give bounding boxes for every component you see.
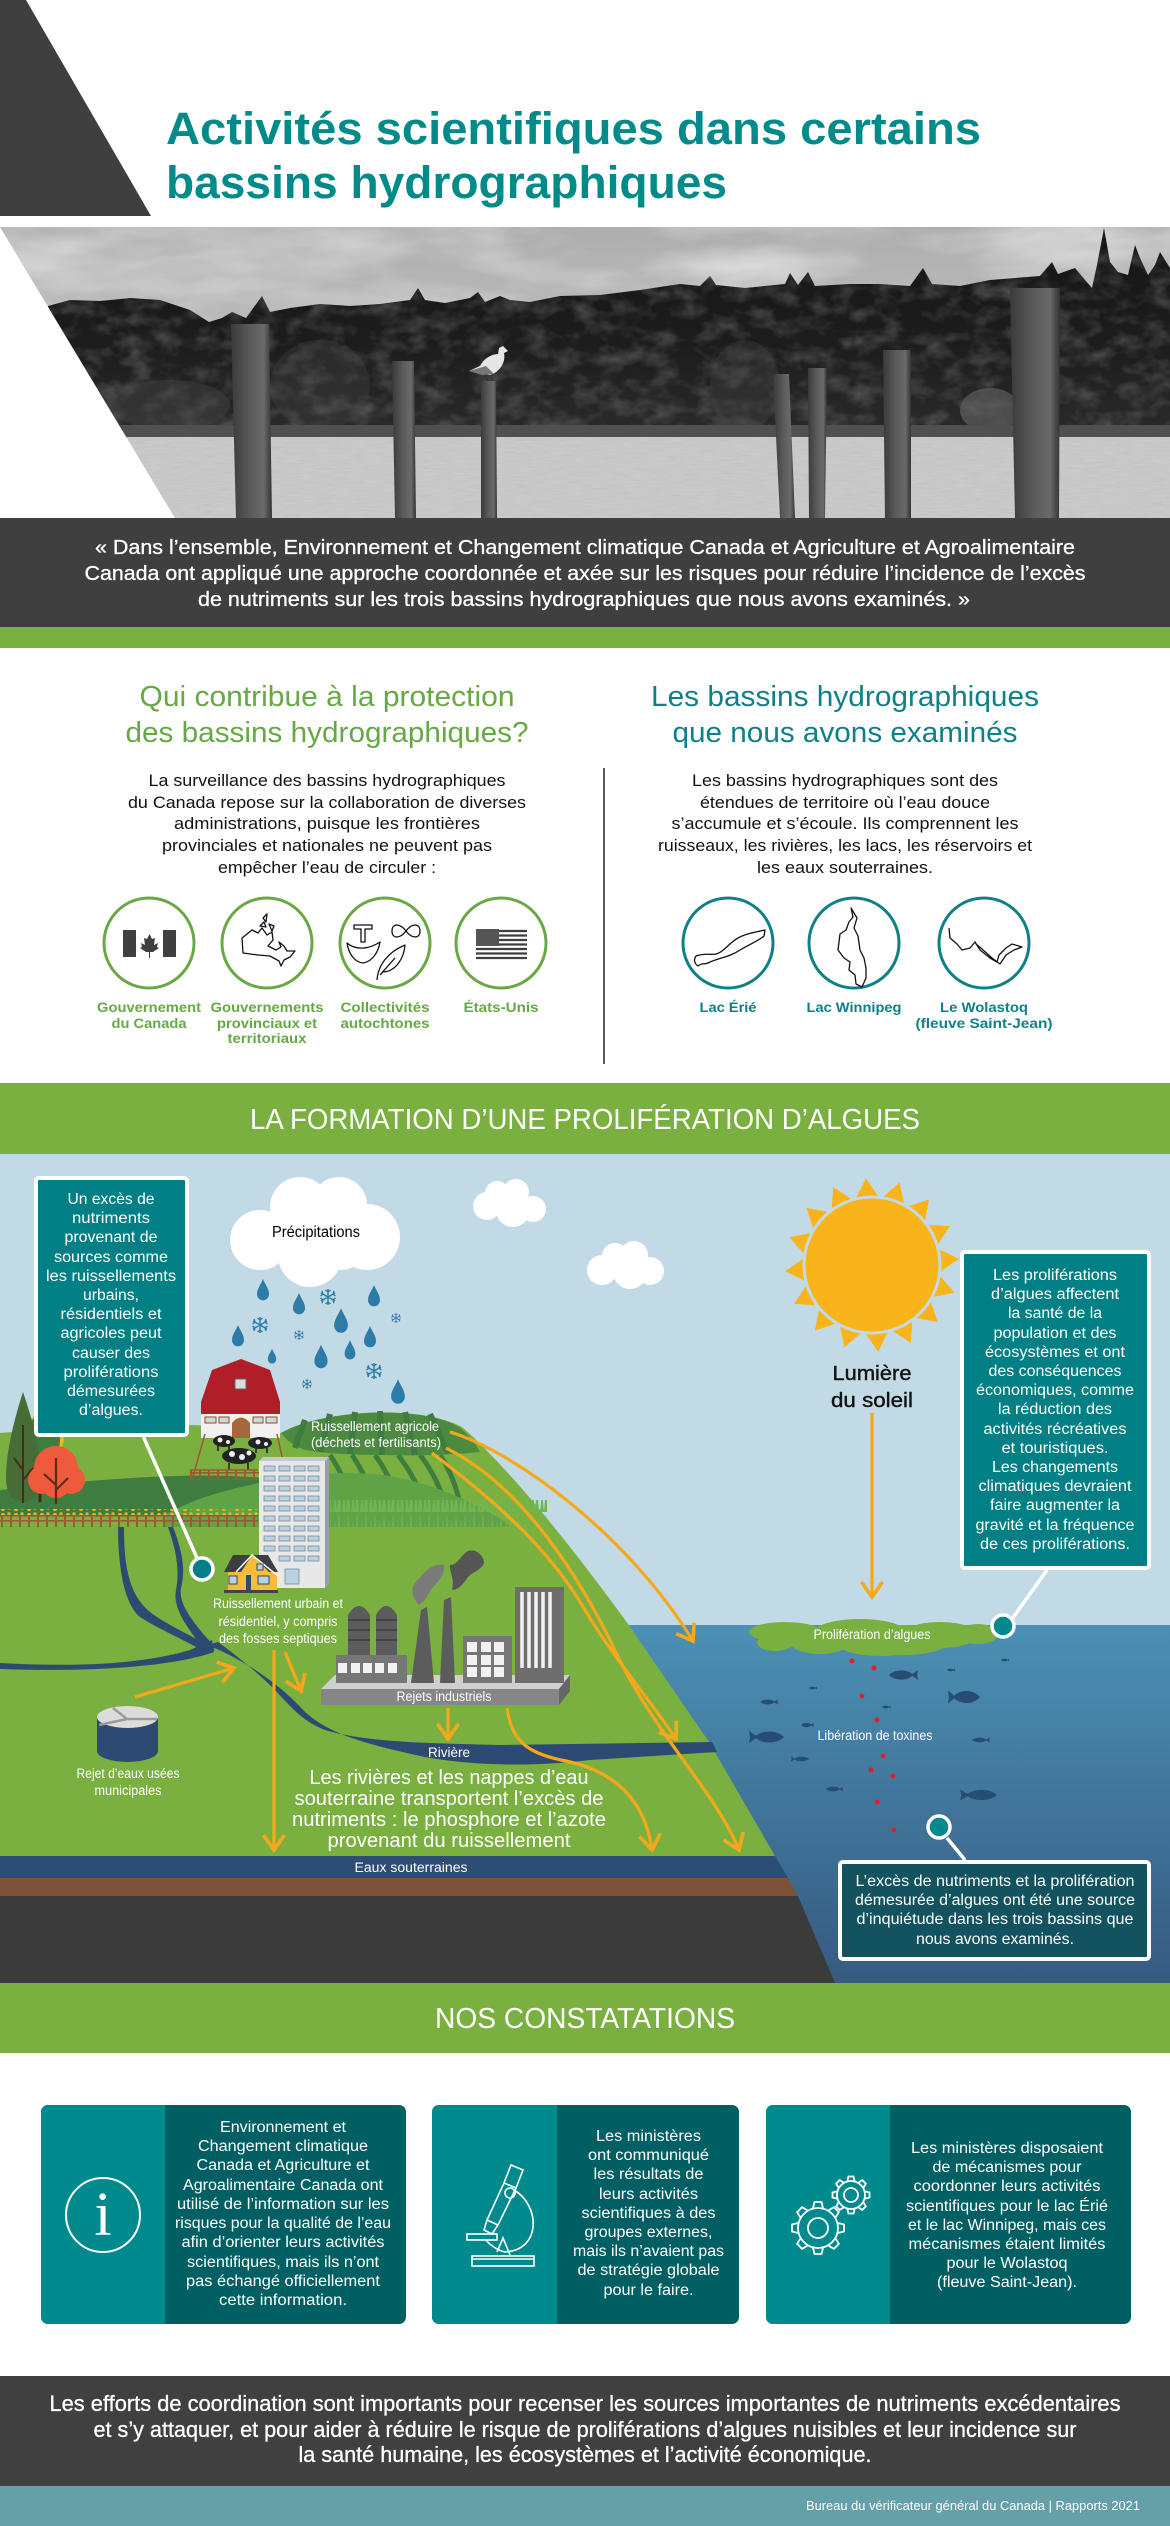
label: Indigenous communities [340, 999, 430, 1031]
text: finding 2: mais ils n’avaient pas [573, 2243, 724, 2260]
heading: who contributes: Qui contribue à la protection [140, 681, 514, 713]
dark corner triangle [0, 0, 151, 216]
callout: effects of blooms: d’algues affectent [991, 1286, 1120, 1303]
finding card 2 [432, 2105, 739, 2324]
label: United States: États-Unis [464, 999, 539, 1015]
callout: effects of blooms: la santé de la [1008, 1305, 1102, 1322]
text: finding 3: pour le Wolastoq [946, 2255, 1068, 2272]
icon: Lake Winnipeg [809, 898, 899, 988]
text: surveillance paragraph [128, 771, 526, 877]
labels on land: Rivière [428, 1745, 470, 1760]
label: Gouvernement du Canada: du Canada [112, 1015, 187, 1031]
finding card 1 [41, 2105, 406, 2324]
label: Lake Winnipeg: Lac Winnipeg [806, 999, 902, 1015]
label: provincial and territorial governments: Gouvernements [210, 999, 324, 1015]
callout: concern in all three watersheds: d’inquiétude dans les trois bassins que [856, 1911, 1134, 1928]
field with crop rows [281, 1411, 480, 1510]
heading: watersheds examined: Les bassins hydrographiques [651, 681, 1039, 713]
text: watershed definition: Les bassins hydrographiques sont des [692, 771, 998, 790]
labels on land: Ruissellement agricole [311, 1419, 439, 1434]
text: finding 1 [175, 2119, 391, 2309]
text: surveillance paragraph: empêcher l’eau de circuler : [218, 858, 436, 877]
hills and grass [0, 1473, 547, 1527]
section banner: algal bloom formation: LA FORMATION D’UNE PROLIFÉRATION D’ALGUES [250, 1103, 920, 1136]
text: surveillance paragraph: du Canada repose sur la collaboration de diverses [128, 793, 526, 812]
clouds [230, 1177, 664, 1289]
icon: map of Canada [222, 898, 312, 988]
text: finding 3: Les ministères disposaient [911, 2140, 1104, 2157]
heading: watersheds examined [651, 681, 1039, 749]
footer: Bureau du vérificateur général du Canada | Rapports 2021 [806, 2498, 1140, 2513]
label: provincial and territorial governments [210, 999, 324, 1046]
text: finding 2: ont communiqué [588, 2147, 709, 2164]
text: finding 2: groupes externes, [584, 2224, 712, 2241]
callout: effects of blooms [962, 1252, 1149, 1637]
text: finding 3: de mécanismes pour [932, 2159, 1082, 2176]
conclusion band [0, 2376, 1170, 2486]
water [600, 1625, 1170, 1983]
icon: Indigenous communities symbols [340, 898, 430, 988]
icon: microscope [467, 2165, 534, 2266]
divider [603, 768, 605, 1064]
rivers [0, 1527, 717, 1765]
callout: excess nutrients sources: urbains, [83, 1287, 139, 1304]
title [166, 103, 981, 208]
labels on land: des fosses septiques [219, 1631, 337, 1646]
panel: who protects the watersheds [97, 681, 546, 1046]
callout: effects of blooms: faire augmenter la [990, 1497, 1120, 1514]
diagram: algal bloom formation [0, 1154, 1170, 1983]
icon: Wolastoq [939, 898, 1029, 988]
label: toxin release: Libération de toxines [818, 1728, 933, 1743]
label: sunlight [831, 1363, 913, 1412]
label: Lake Erie: Lac Érié [700, 999, 757, 1015]
toxins: red dots [850, 1658, 896, 1832]
text: finding 2: Les ministères [596, 2128, 701, 2145]
conclusion band: la santé humaine, les écosystèmes et l’activité économique. [298, 2442, 872, 2467]
label: Gouvernement du Canada [97, 999, 201, 1031]
groundwater and soil layers [0, 1856, 835, 1983]
text: finding 1: risques pour la qualité de l’eau [175, 2215, 391, 2232]
apartment building [259, 1457, 329, 1588]
text: finding 2: pour le faire. [604, 2282, 694, 2299]
panel: watersheds examined [651, 681, 1052, 1031]
heading: who contributes [126, 681, 528, 749]
label: provincial and territorial governments: provinciaux et [217, 1015, 317, 1031]
icon: information: i [94, 2181, 112, 2249]
labels on land: Rejets industriels [396, 1689, 492, 1704]
text: rivers and groundwater carry nutrients: provenant du ruissellement [328, 1830, 571, 1852]
text: surveillance paragraph: La surveillance des bassins hydrographiques [148, 771, 506, 790]
photo: lake with posts and gull [0, 227, 1170, 518]
callout: effects of blooms: écosystèmes et ont [985, 1344, 1126, 1361]
callout: effects of blooms: des conséquences [988, 1363, 1122, 1380]
text: finding 3: scientifiques pour le lac Érié [906, 2198, 1108, 2215]
label: Wolastoq: (fleuve Saint-Jean) [916, 1015, 1052, 1031]
icon: gears [792, 2176, 870, 2254]
label: Indigenous communities: autochtones [340, 1015, 430, 1031]
quote band: de nutriments sur les trois bassins hydrographiques que nous avons examinés. » [198, 589, 970, 611]
callout: effects of blooms: de ces proliférations. [980, 1536, 1130, 1553]
label: provincial and territorial governments: territoriaux [228, 1030, 307, 1046]
label: sunlight: Lumière [832, 1363, 912, 1385]
callout: excess nutrients sources: provenant de [64, 1229, 158, 1246]
callout: excess nutrients sources: nutriments [72, 1210, 150, 1227]
sun [784, 1177, 960, 1353]
quote band: « Dans l’ensemble, Environnement et Changement climatique Canada et Agriculture et Agroalimentaire [95, 537, 1075, 559]
conclusion band: et s’y attaquer, et pour aider à réduire le risque de proliférations d’algues nuisibles et leur incidence sur [94, 2417, 1076, 2442]
text: rivers and groundwater carry nutrients: Les rivières et les nappes d’eau [310, 1767, 588, 1789]
text: rivers and groundwater carry nutrients: nutriments : le phosphore et l’azote [292, 1809, 606, 1831]
callout: concern in all three watersheds: nous avons examinés. [916, 1931, 1074, 1948]
callout: effects of blooms: et touristiques. [1002, 1440, 1108, 1457]
text: watershed definition: les eaux souterraines. [757, 858, 933, 877]
callout: effects of blooms: Les proliférations [993, 1267, 1117, 1284]
cows [190, 1434, 285, 1480]
text: watershed definition: ruisseaux, les rivières, les lacs, les réservoirs et [658, 836, 1032, 855]
callout: excess nutrients sources: démesurées [67, 1383, 155, 1400]
smoke [412, 1550, 484, 1605]
label: Wolastoq [916, 999, 1052, 1031]
callout: excess nutrients sources: les ruissellements [46, 1268, 176, 1285]
algal bloom: Prolifération d’algues [814, 1627, 931, 1642]
callout: effects of blooms: économiques, comme [976, 1382, 1134, 1399]
quote band [0, 518, 1170, 627]
text: finding 3: (fleuve Saint-Jean). [937, 2274, 1077, 2291]
trees [6, 1392, 85, 1504]
conclusion band: Les efforts de coordination sont importants pour recenser les sources importantes de nutriments excédentaires [50, 2391, 1120, 2416]
section banner: algal bloom formation [0, 1083, 1170, 1154]
label: Gouvernement du Canada: Gouvernement [97, 999, 201, 1015]
heading: watersheds examined: que nous avons examinés [672, 717, 1018, 749]
labels on land [76, 1419, 492, 1875]
callout: effects of blooms: activités récréatives [984, 1421, 1127, 1438]
house [224, 1555, 278, 1593]
callout: excess nutrients sources: d’algues. [79, 1402, 143, 1419]
callout: concern in all three watersheds: L’excès de nutriments et la prolifération [856, 1873, 1134, 1890]
algal bloom [749, 1619, 998, 1656]
callout: excess nutrients sources: Un excès de [68, 1191, 154, 1208]
text: finding 1: cette information. [219, 2292, 347, 2309]
text: finding 3 [906, 2140, 1108, 2291]
icon: US flag [456, 898, 546, 988]
text: surveillance paragraph: administrations, puisque les frontières [174, 814, 480, 833]
callout: effects of blooms: Les changements [992, 1459, 1118, 1476]
icon: information [66, 2178, 140, 2252]
callout: effects of blooms: climatiques devraient [978, 1478, 1132, 1495]
tank: municipal wastewater [97, 1706, 158, 1762]
text: finding 2 [573, 2128, 724, 2299]
title: Activités scientifiques dans certains [166, 103, 981, 154]
title: bassins hydrographiques [166, 157, 727, 208]
land [0, 1412, 775, 1856]
text: finding 1: pas échangé officiellement [186, 2273, 381, 2290]
text: finding 1: Changement climatique [198, 2138, 368, 2155]
text: finding 1: afin d’orienter leurs activités [182, 2234, 385, 2251]
label: precipitation: Précipitations [272, 1224, 360, 1241]
text: finding 2: de stratégie globale [578, 2262, 720, 2279]
labels on land: Eaux souterraines [354, 1860, 468, 1875]
fence and flowers [0, 1509, 258, 1527]
callout: excess nutrients sources [36, 1178, 213, 1580]
text: finding 2: leurs activités [599, 2186, 698, 2203]
green stripe [0, 627, 1170, 648]
callout: effects of blooms: la réduction des [998, 1401, 1112, 1418]
labels on land: municipales [94, 1783, 162, 1798]
sky [0, 1154, 1170, 1625]
arrows: nutrient runoff [135, 1413, 872, 1850]
labels on land: (déchets et fertilisants) [311, 1435, 441, 1450]
section banner: our findings: NOS CONSTATATIONS [435, 2003, 735, 2035]
callout: excess nutrients sources: sources comme [54, 1249, 168, 1266]
text: watershed definition [658, 771, 1032, 877]
factory [321, 1550, 570, 1705]
labels on land: résidentiel, y compris [218, 1614, 338, 1629]
text: finding 2: scientifiques à des [582, 2205, 716, 2222]
text: finding 1: Environnement et [220, 2119, 347, 2136]
text: finding 1: utilisé de l’information sur les [177, 2196, 389, 2213]
text: rivers and groundwater carry nutrients [292, 1767, 606, 1852]
finding card 3 [766, 2105, 1131, 2324]
callout: excess nutrients sources: proliférations [64, 1364, 159, 1381]
text: finding 1: Agroalimentaire Canada ont [183, 2177, 384, 2194]
labels on land: Rejet d’eaux usées [76, 1766, 180, 1781]
text: finding 3: mécanismes étaient limités [908, 2236, 1106, 2253]
callout: concern in all three watersheds: démesurée d’algues ont été une source [855, 1892, 1135, 1909]
text: finding 3: et le lac Winnipeg, mais ces [908, 2217, 1106, 2234]
icon: raindrops and snowflakes [232, 1279, 405, 1404]
icon: Lake Erie [683, 898, 773, 988]
label: sunlight: du soleil [831, 1390, 913, 1412]
label: Indigenous communities: Collectivités [340, 999, 430, 1015]
text: finding 3: coordonner leurs activités [914, 2178, 1101, 2195]
callout: effects of blooms: population et des [994, 1325, 1117, 1342]
labels on land: Ruissellement urbain et [213, 1596, 343, 1611]
text: finding 1: Canada et Agriculture et [196, 2157, 370, 2174]
text: finding 2: les résultats de [594, 2166, 704, 2183]
footer [0, 2486, 1170, 2526]
barn [201, 1359, 280, 1438]
text: surveillance paragraph: provinciales et nationales ne peuvent pas [162, 836, 492, 855]
section banner: our findings [0, 1983, 1170, 2053]
label: Wolastoq: Le Wolastoq [940, 999, 1028, 1015]
callout: excess nutrients sources: causer des [72, 1345, 150, 1362]
callout: excess nutrients sources: résidentiels et [60, 1306, 162, 1323]
heading: who contributes: des bassins hydrographiques? [126, 717, 528, 749]
text: finding 1: scientifiques, mais ils n’ont [187, 2254, 380, 2271]
icon: Canadian flag [104, 898, 194, 988]
callout: effects of blooms: gravité et la fréquence [976, 1517, 1134, 1534]
text: watershed definition: s’accumule et s’écoule. Ils comprennent les [672, 814, 1018, 833]
fish [749, 1658, 1009, 1800]
callout: excess nutrients sources: agricoles peut [60, 1325, 162, 1342]
quote band: Canada ont appliqué une approche coordonnée et axée sur les risques pour réduire l’incidence de l’excès [84, 563, 1086, 585]
callout: concern in all three watersheds [840, 1816, 1149, 1959]
text: rivers and groundwater carry nutrients: souterraine transportent l’excès de [294, 1788, 604, 1810]
text: watershed definition: étendues de territoire où l’eau douce [700, 793, 990, 812]
